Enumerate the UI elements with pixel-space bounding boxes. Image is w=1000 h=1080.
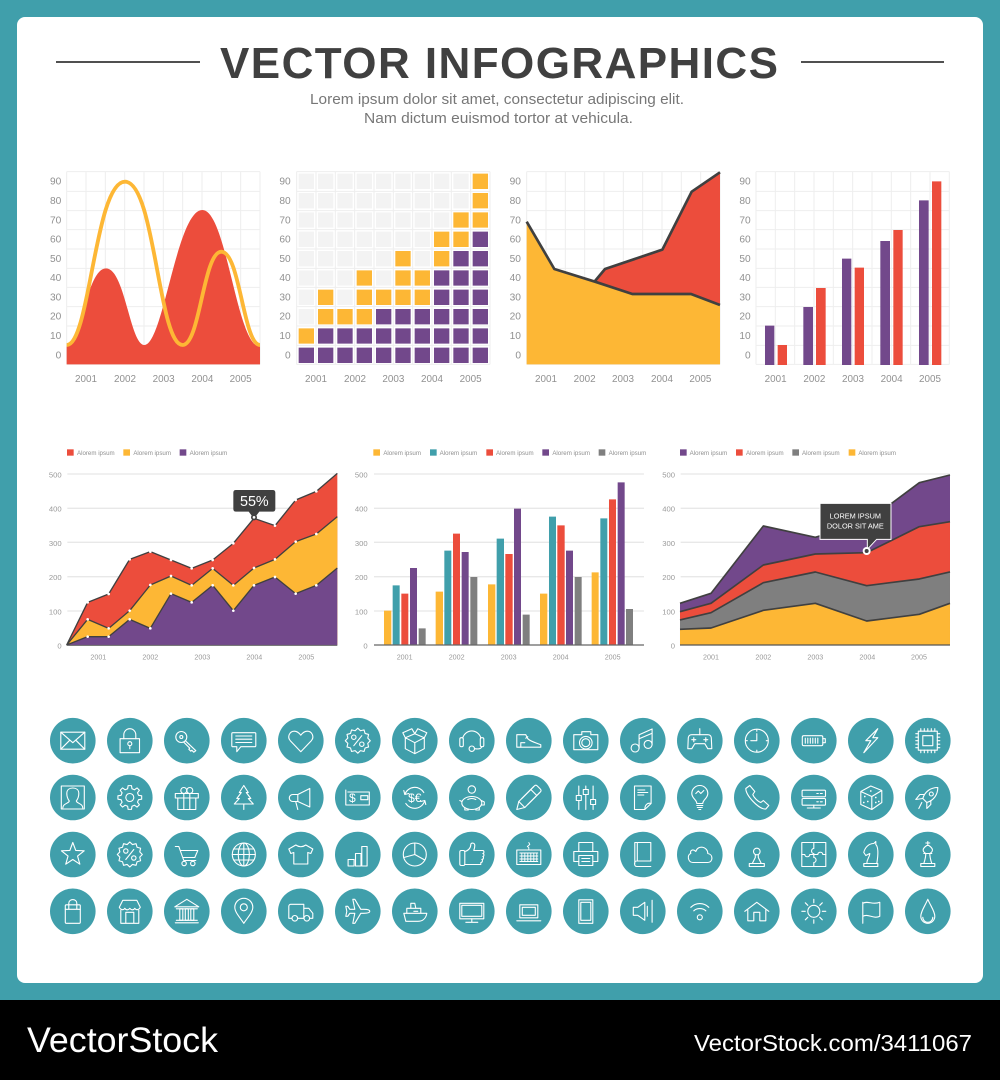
icon: pencil (506, 775, 552, 820)
icon: star (50, 832, 96, 877)
icon: water drop (905, 888, 951, 934)
icon: pawn (734, 832, 780, 877)
chart: smooth area and line: 80 (50, 196, 62, 207)
legend: Alorem ipsum (609, 450, 646, 457)
chart: stacked area with markers: 2002 (142, 654, 158, 662)
chart: angular area: 2005 (689, 374, 712, 385)
legend (373, 449, 646, 457)
chart: stacked area with markers: 200 (49, 573, 62, 582)
legend: Alorem ipsum (496, 450, 534, 457)
icon: shopping bag (50, 888, 96, 934)
chart: angular area: 90 (510, 177, 521, 188)
icon: puzzle (791, 832, 837, 877)
chart: square waffle (279, 172, 490, 385)
chart: stacked area with markers: 500 (49, 471, 62, 480)
legend: Alorem ipsum (690, 450, 727, 457)
icon: telephone (734, 775, 780, 820)
chart: paired bars: 2005 (919, 374, 941, 385)
chart: paired bars: 2003 (842, 374, 864, 385)
chart: smooth area and line: 2004 (191, 374, 214, 385)
chart: angular area: 40 (510, 273, 521, 284)
icon: light bulb (677, 775, 723, 820)
chart: angular area: 70 (510, 215, 521, 226)
icon: megaphone (278, 775, 324, 820)
chart: square waffle: 40 (279, 273, 291, 284)
chart: layered area with callout: 2002 (755, 654, 771, 662)
legend (680, 449, 896, 457)
chart: square waffle: 90 (279, 177, 291, 188)
chart: square waffle: 20 (279, 312, 291, 323)
title: VECTOR INFOGRAPHICS (220, 39, 778, 88)
chart: smooth area and line (50, 172, 260, 385)
chart: angular area: 80 (510, 196, 521, 207)
icon: currency exchange: $€ (408, 791, 422, 805)
subtitle: Nam dictum euismod tortor at vehicula. (364, 111, 633, 127)
chart: square waffle: 50 (279, 254, 291, 265)
chart: layered area with callout: 400 (662, 505, 675, 514)
chart: paired bars: 2001 (765, 374, 787, 385)
chart: square waffle: 2003 (382, 374, 405, 385)
chart: angular area: 50 (510, 254, 521, 265)
icon: server (791, 775, 837, 820)
chart: paired bars: 0 (745, 350, 751, 361)
chart: layered area with callout: 0 (671, 641, 675, 650)
left title rule (56, 61, 200, 63)
legend: Alorem ipsum (802, 450, 840, 457)
chart: smooth area and line: 70 (50, 215, 62, 226)
chart: paired bars: 80 (739, 196, 751, 207)
chart: square waffle: 2002 (344, 374, 366, 385)
icon: sliders (563, 775, 609, 820)
icon: battery (791, 718, 837, 764)
chart: grouped bars (355, 449, 646, 662)
icon: flag (848, 888, 894, 934)
chart: smooth area and line: 90 (50, 177, 62, 188)
icon: gift (164, 775, 210, 820)
chart: grouped bars: 500 (355, 471, 368, 480)
chart: angular area: 2001 (535, 374, 557, 385)
icon: bank (164, 888, 210, 934)
chart: layered area with callout: 500 (662, 471, 675, 480)
callout: lorem ipsum: DOLOR SIT AME (827, 521, 884, 530)
black footer band (0, 1000, 1000, 1080)
icon: wallet (335, 775, 381, 820)
icon: sun (791, 888, 837, 934)
chart: square waffle: 2005 (460, 374, 482, 385)
chart: paired bars: 90 (739, 177, 751, 188)
chart: grouped bars: 0 (363, 641, 368, 650)
chart: paired bars: 70 (739, 215, 751, 226)
icon: pie chart (392, 832, 438, 877)
chart: smooth area and line: 30 (50, 292, 62, 303)
chart: angular area (510, 172, 720, 385)
chart: grouped bars: 2004 (553, 654, 569, 662)
legend: Alorem ipsum (77, 450, 115, 457)
chart: layered area with callout: 2001 (703, 654, 719, 662)
chart: stacked area with markers: 400 (49, 505, 62, 514)
callout: 55% (233, 490, 275, 520)
chart: paired bars: 50 (739, 254, 751, 265)
chart: smooth area and line: 50 (50, 254, 62, 265)
chart: layered area with callout: 300 (662, 539, 675, 548)
icon: t-shirt (278, 832, 324, 877)
icon: bar steps (335, 832, 381, 877)
right title rule (801, 61, 944, 63)
icon: book (620, 832, 666, 877)
chart: angular area: 0 (515, 350, 521, 361)
icon: chess knight (848, 832, 894, 877)
chart: smooth area and line: 20 (50, 312, 62, 323)
icon: key (164, 718, 210, 764)
icon: headset (449, 718, 495, 764)
icon: wifi (677, 888, 723, 934)
chart: square waffle: 80 (279, 196, 291, 207)
icon: map pin (221, 888, 267, 934)
icon: document (620, 775, 666, 820)
icon: piggy bank (449, 775, 495, 820)
chart: layered area with callout: 2004 (859, 654, 875, 662)
icon: ship (392, 888, 438, 934)
chart: layered area with callout (662, 449, 950, 662)
legend: Alorem ipsum (133, 450, 171, 457)
chart: paired bars: 60 (739, 235, 751, 246)
chart: layered area with callout: 100 (662, 607, 675, 616)
icon: heart (278, 718, 324, 764)
chart: paired bars: 20 (739, 312, 751, 323)
chart: square waffle: 2001 (305, 374, 327, 385)
icon: wallet: $ (349, 791, 356, 805)
chart: grouped bars: 2002 (449, 654, 465, 662)
chart: stacked area with markers: 300 (49, 539, 62, 548)
icon: camera (563, 718, 609, 764)
chart: square waffle: 30 (279, 292, 291, 303)
icon: chat bubble (221, 718, 267, 764)
icon: clock (734, 718, 780, 764)
chart: paired bars: 2004 (881, 374, 903, 385)
chart: angular area: 20 (510, 312, 521, 323)
icon: chess bishop (905, 832, 951, 877)
chart: grouped bars: 300 (355, 539, 368, 548)
chart: layered area with callout: 2003 (807, 654, 823, 662)
chart: paired bars: 2002 (803, 374, 825, 385)
chart: square waffle: 10 (279, 331, 291, 342)
chart: stacked area with markers: 0 (57, 641, 62, 650)
callout: lorem ipsum: LOREM IPSUM (830, 511, 881, 520)
chart: grouped bars: 200 (355, 573, 368, 582)
icon: gamepad (677, 718, 723, 764)
legend: Alorem ipsum (190, 450, 227, 457)
chart: stacked area with markers: 2004 (246, 654, 262, 662)
chart: square waffle: 70 (279, 215, 291, 226)
chart: smooth area and line: 2002 (114, 374, 136, 385)
chart: grouped bars: 100 (355, 607, 368, 616)
chart: stacked area with markers (49, 449, 337, 662)
icon: shopping cart (164, 832, 210, 877)
chart: layered area with callout: 200 (662, 573, 675, 582)
footer url: VectorStock.com/3411067 (694, 1030, 972, 1056)
legend (67, 449, 227, 457)
chart: paired bars (739, 172, 949, 385)
icon: globe (221, 832, 267, 877)
chart: square waffle: 60 (279, 235, 291, 246)
legend: Alorem ipsum (746, 450, 784, 457)
chart: angular area: 60 (510, 235, 521, 246)
icon: laptop (506, 888, 552, 934)
chart: paired bars: 10 (739, 331, 751, 342)
icon: airplane (335, 888, 381, 934)
chart: layered area with callout: 2005 (911, 654, 927, 662)
icon: printer (563, 832, 609, 877)
legend: Alorem ipsum (858, 450, 896, 457)
icon: rocket (905, 775, 951, 820)
icon: cloud (677, 832, 723, 877)
icon: music notes (620, 718, 666, 764)
chart: smooth area and line: 0 (56, 350, 62, 361)
chart: grouped bars: 2005 (605, 654, 621, 662)
icon: shop (107, 888, 153, 934)
legend: Alorem ipsum (383, 450, 421, 457)
chart: paired bars: 30 (739, 292, 751, 303)
legend: Alorem ipsum (552, 450, 590, 457)
chart: grouped bars: 2003 (501, 654, 517, 662)
chart: stacked area with markers: 100 (49, 607, 62, 616)
callout: lorem ipsum (820, 503, 891, 554)
icon: pine tree (221, 775, 267, 820)
subtitle: Lorem ipsum dolor sit amet, consectetur adipiscing elit. (310, 92, 684, 108)
icon: open box (392, 718, 438, 764)
icon: gear (107, 775, 153, 820)
chart: stacked area with markers: 2003 (194, 654, 210, 662)
chart: smooth area and line: 2001 (75, 374, 97, 385)
chart: angular area: 2003 (612, 374, 634, 385)
subtitle (310, 92, 684, 127)
chart: angular area: 10 (510, 331, 521, 342)
icon: percent badge (335, 718, 381, 764)
chart: stacked area with markers: 2005 (298, 654, 314, 662)
chart: paired bars: 40 (739, 273, 751, 284)
chart: stacked area with markers: 2001 (90, 654, 106, 662)
icon: home (734, 888, 780, 934)
icon: envelope (50, 718, 96, 764)
chart: square waffle: 2004 (421, 374, 443, 385)
legend: Alorem ipsum (440, 450, 477, 457)
icon: monitor (449, 888, 495, 934)
icon: shoe (506, 718, 552, 764)
chart: angular area: 2004 (651, 374, 673, 385)
icon: discount badge (107, 832, 153, 877)
chart: square waffle: 0 (285, 350, 291, 361)
icon: lightning bolt (848, 718, 894, 764)
chart: smooth area and line: 10 (50, 331, 62, 342)
icon: profile (50, 775, 96, 820)
icon: smartphone (563, 888, 609, 934)
icon: thumbs up (449, 832, 495, 877)
icon: speaker (620, 888, 666, 934)
chart: smooth area and line: 2005 (230, 374, 252, 385)
icon: padlock (107, 718, 153, 764)
chart: grouped bars: 2001 (397, 654, 413, 662)
icon: truck (278, 888, 324, 934)
chart: angular area: 30 (510, 292, 521, 303)
chart: angular area: 2002 (574, 374, 596, 385)
chart: grouped bars: 400 (355, 505, 368, 514)
icon: dice (848, 775, 894, 820)
icon: microchip (905, 718, 951, 764)
footer logo: VectorStock (27, 1020, 218, 1060)
icon: currency exchange (392, 775, 438, 820)
callout: 55%: 55% (240, 494, 269, 510)
icon: keyboard (506, 832, 552, 877)
chart: smooth area and line: 40 (50, 273, 62, 284)
chart: smooth area and line: 2003 (153, 374, 175, 385)
chart: smooth area and line: 60 (50, 235, 62, 246)
